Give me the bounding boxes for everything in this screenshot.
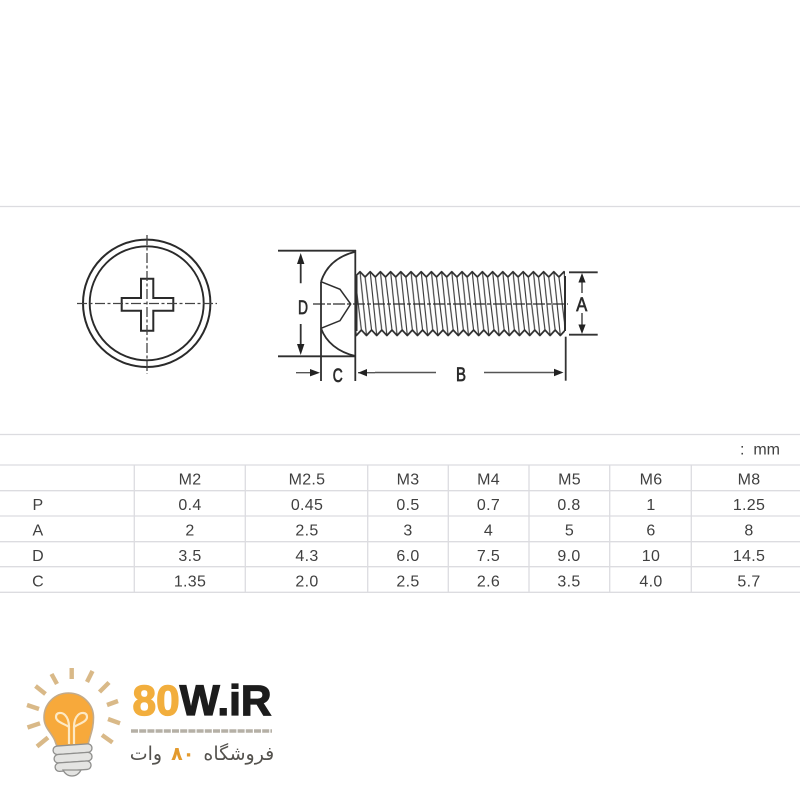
bulb filament (56, 713, 87, 744)
dimension A (569, 272, 598, 335)
table header row: M2.5 (289, 472, 325, 488)
table row C: 2.6 (477, 574, 500, 590)
table row C: 2.0 (295, 574, 319, 590)
icon: light bulb (27, 668, 120, 776)
dimension D: D (298, 298, 308, 319)
dimension A: A (576, 295, 587, 316)
table row A: 2.5 (295, 522, 319, 540)
logo: 80W.iR (27, 668, 274, 776)
dimension B: B (456, 365, 466, 386)
table row A: 6 (646, 522, 656, 540)
table row P: 1.25 (733, 497, 765, 514)
table header row: M2 (179, 472, 201, 488)
table row C: 2.5 (396, 574, 420, 590)
diagram: screw side view (278, 250, 598, 387)
table header row: M6 (640, 472, 662, 488)
table row D: 9.0 (557, 548, 581, 565)
table header row: M4 (477, 472, 500, 488)
table row P: 0.7 (477, 497, 500, 514)
table row D: 14.5 (733, 548, 765, 565)
table row C: 3.5 (557, 574, 581, 590)
table row D: 4.3 (295, 548, 319, 565)
table row C: 4.0 (639, 574, 663, 590)
dimension D (297, 253, 308, 355)
table row C: 1.35 (174, 574, 206, 590)
table row C: 5.7 (737, 574, 761, 590)
dimension C (296, 366, 375, 387)
unit label: : mm (740, 442, 780, 458)
bulb rays (27, 668, 120, 746)
table row P: 1 (646, 497, 656, 514)
screw head profile (278, 250, 568, 381)
table row P (33, 497, 765, 514)
icon: screw head top view (77, 235, 217, 374)
table row D: 10 (642, 548, 660, 565)
bulb glass (44, 693, 94, 746)
table row P: 0.45 (291, 497, 323, 514)
table row A: 5 (565, 522, 574, 540)
table row D: 3.5 (178, 548, 202, 565)
table: screw dimensions (0, 465, 800, 592)
table row P: 0.8 (557, 497, 581, 514)
table row P: 0.4 (178, 497, 202, 514)
logo wordmark: 80W.iR (132, 677, 272, 725)
dimension C: C (333, 366, 343, 387)
table row A: 3 (403, 522, 413, 540)
table row A: 4 (484, 522, 493, 540)
table row A: A (33, 522, 44, 540)
table row P: P (33, 497, 43, 514)
table row D: 6.0 (396, 548, 420, 565)
table header row: M5 (558, 472, 581, 488)
screw thread (356, 270, 565, 337)
table row A (33, 522, 754, 540)
table row C (32, 574, 761, 590)
table header row: M8 (738, 472, 760, 488)
bulb screw base (53, 744, 92, 776)
dimension B (375, 337, 566, 386)
table row D: 7.5 (477, 548, 500, 565)
logo divider (131, 729, 272, 733)
table row C: C (32, 574, 44, 590)
logo tagline: فروشگاه ۸۰ وات (130, 742, 274, 765)
table row P: 0.5 (396, 497, 420, 514)
table header row: M3 (397, 472, 419, 488)
table header row (179, 472, 760, 488)
table row D (32, 548, 765, 565)
table row A: 2 (185, 522, 195, 540)
table row A: 8 (744, 522, 754, 540)
table row D: D (32, 548, 44, 565)
